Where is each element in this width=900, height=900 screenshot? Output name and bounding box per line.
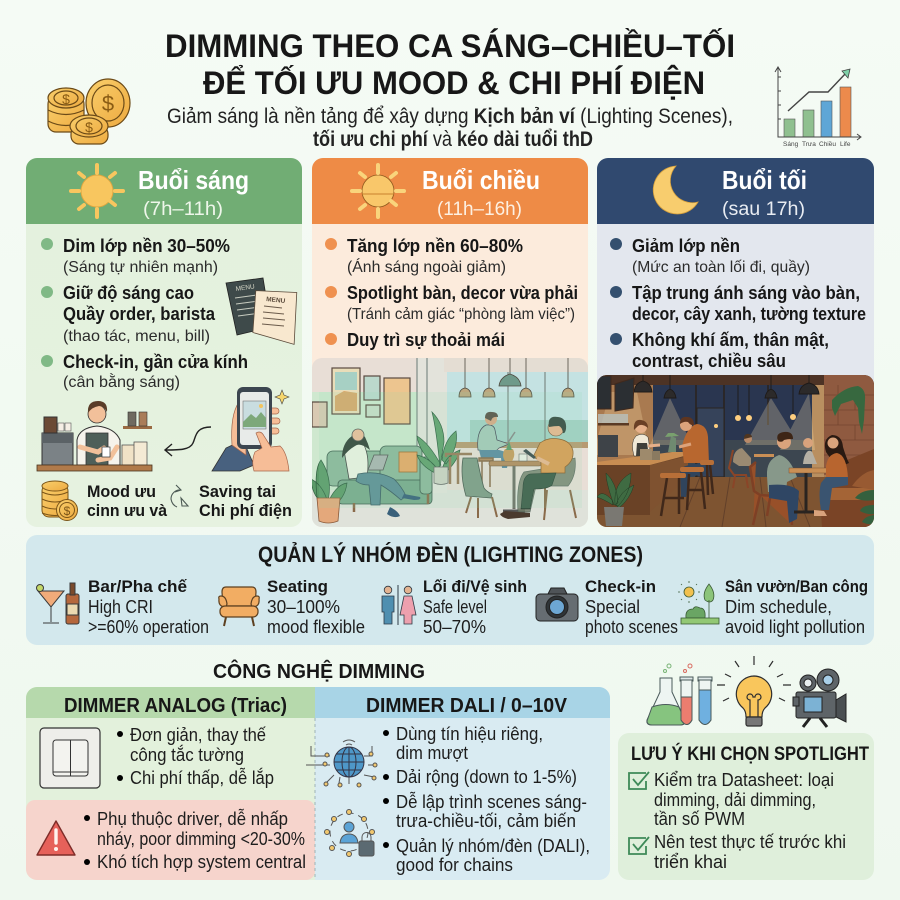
- icon: warning triangle: [37, 821, 75, 855]
- man with tablet: [500, 417, 576, 520]
- tint overlay: [319, 392, 582, 508]
- analog bullets: Chi phí thấp, dễ lắp: [130, 767, 274, 788]
- morning bullets: Quầy order, barista: [63, 304, 216, 324]
- afternoon heading: Buổi chiều: [422, 165, 540, 195]
- icon: cycle arrows: [171, 485, 188, 507]
- note two: triển khai: [654, 852, 727, 872]
- DALI bullets: Dải rộng (down to 1-5%): [396, 767, 577, 787]
- icon: coin stack: $: [64, 504, 71, 518]
- icon: gold coins: [48, 79, 130, 144]
- afternoon bullets: (Ánh sáng ngoài giảm): [347, 257, 506, 276]
- evening bullets: Không khí ấm, thân mật,: [632, 330, 829, 350]
- saving text: Chi phí điện: [199, 501, 292, 520]
- DALI bullets: [383, 724, 590, 875]
- counter and seated man: [597, 417, 709, 515]
- afternoon bullets: (Tránh cảm giác “phòng làm việc”): [347, 306, 575, 323]
- hanging lamps: [634, 375, 819, 415]
- mood text: cinn ưu và: [87, 501, 168, 520]
- morning bullets: (Sáng tự nhiên mạnh): [63, 259, 218, 276]
- light cones: [597, 392, 815, 455]
- icon: lab flask and tubes: [647, 664, 712, 725]
- evening bullets: decor, cây xanh, tường texture: [632, 304, 866, 324]
- zone: check-in: Special: [585, 597, 640, 617]
- zone: walkway: Safe level: [423, 597, 487, 617]
- chalkboards: [597, 376, 634, 411]
- panel: spotlight notes: [618, 733, 874, 880]
- zone: seating: Seating: [267, 577, 328, 596]
- analog bullets: [117, 725, 274, 788]
- analog bullets: Đơn giản, thay thế: [130, 725, 266, 745]
- evening bullets: Giảm lớp nền: [632, 236, 740, 256]
- panel: evening: [597, 158, 874, 527]
- zone: bar: High CRI: [88, 597, 153, 617]
- panel: lighting zones: [26, 535, 874, 645]
- DALI bullets: good for chains: [396, 855, 513, 875]
- DALI bullets: Quản lý nhóm/đèn (DALI),: [396, 836, 590, 856]
- morning bullets: [41, 236, 248, 391]
- technology heading: CÔNG NGHỆ DIMMING: [213, 659, 425, 683]
- icon: network globe: [306, 740, 377, 787]
- DALI bullets: Dùng tín hiệu riêng,: [396, 724, 543, 744]
- middle plant: [417, 412, 460, 484]
- mood text: Mood ưu: [87, 482, 156, 501]
- zone: walkway: Lối đi/Vệ sinh: [423, 577, 527, 596]
- subtitle: Giảm sáng là nền tảng để xây dựng Kịch bản ví (Lighting Scenes),: [167, 105, 733, 128]
- analog warnings: nháy, poor dimming <20-30%: [97, 829, 305, 849]
- morning bullets: Dim lớp nền 30–50%: [63, 236, 230, 256]
- pendant lamps: [459, 358, 574, 397]
- booth: [820, 449, 874, 527]
- note two: Nên test thực tế trước khi: [654, 832, 846, 852]
- panel: afternoon: [311, 158, 589, 527]
- evening cafe illustration: [597, 375, 874, 527]
- note one: [654, 770, 834, 829]
- icon: gold coins: $: [62, 91, 70, 107]
- afternoon hours: (11h–16h): [437, 199, 522, 220]
- phone in hand illustration: [212, 387, 289, 471]
- afternoon bullets: [325, 236, 578, 350]
- icon: cocktail and bottle: [36, 583, 79, 624]
- saving text: Saving tai: [199, 482, 276, 501]
- note two: [654, 832, 846, 872]
- wall frames: [312, 368, 410, 427]
- afternoon cafe illustration: [311, 358, 589, 527]
- icon: gold coins: $: [102, 91, 114, 116]
- zone: check-in: photo scenes: [585, 617, 678, 637]
- note one: Kiểm tra Datasheet: loại: [654, 770, 834, 790]
- front table: [489, 441, 541, 511]
- icon: film camera: [793, 669, 846, 727]
- stools: [661, 465, 713, 516]
- title: ĐỂ TỐI ƯU MOOD & CHI PHÍ ĐIỆN: [203, 65, 705, 101]
- icon: menus: [226, 278, 298, 344]
- zone: bar: [88, 577, 209, 637]
- icon: user control and lock: [324, 810, 374, 856]
- man at window: [446, 412, 515, 487]
- icon: growth bar chart: Chiều: [819, 139, 836, 148]
- evening hours: (sau 17h): [722, 199, 805, 220]
- zone: walkway: [423, 577, 527, 637]
- title: [165, 28, 735, 101]
- plant and pot: [597, 473, 634, 526]
- icon: camera: [536, 588, 578, 621]
- analog bullets: công tắc tường: [130, 744, 244, 765]
- DALI bullets: trưa-chiều-tối, cảm biến: [396, 811, 576, 831]
- spotlight heading: LƯU Ý KHI CHỌN SPOTLIGHT: [631, 743, 869, 765]
- icon: afternoon sun: [352, 165, 404, 217]
- zones heading: QUẢN LÝ NHÓM ĐÈN (LIGHTING ZONES): [258, 542, 643, 567]
- subtitle: tối ưu chi phí và kéo dài tuổi thD: [313, 128, 593, 151]
- front chair: [462, 458, 497, 518]
- left plant: [311, 460, 347, 523]
- sofa and woman: [327, 429, 432, 517]
- table front couple: [750, 432, 849, 525]
- zone: seating: 30–100%: [267, 597, 340, 617]
- analog warnings: Phụ thuộc driver, dễ nhấp: [97, 808, 288, 829]
- zone: seating: mood flexible: [267, 617, 365, 637]
- icon: menus: MENU: [235, 283, 256, 293]
- icon: gold coins: $: [85, 119, 93, 135]
- panel: morning: [26, 158, 302, 527]
- zone: check-in: [585, 577, 678, 637]
- window bar counter: [449, 442, 589, 448]
- note one: dimming, dải dimming,: [654, 790, 816, 810]
- morning bullets: (thao tác, menu, bill): [63, 328, 210, 345]
- saving text: [199, 482, 292, 520]
- subtitle: [167, 105, 733, 151]
- panel: dimmer technology: [26, 687, 610, 880]
- icon: growth bar chart: [775, 67, 861, 148]
- zone: garden: Sân vườn/Ban công: [725, 577, 868, 596]
- evening header: [597, 158, 874, 224]
- morning header: [26, 158, 302, 224]
- afternoon bullets: Spotlight bàn, decor vừa phải: [347, 283, 578, 303]
- note one: tần số PWM: [654, 809, 745, 829]
- morning bullets: Check-in, gần cửa kính: [63, 352, 248, 372]
- analog warnings: [84, 808, 306, 872]
- icon: sun: [71, 165, 123, 217]
- zone: seating: [267, 577, 365, 637]
- barista illustration: [37, 401, 152, 471]
- arrow: phone to barista: [165, 427, 211, 456]
- zone: garden: Dim schedule,: [725, 597, 832, 617]
- DALI bullets: dim mượt: [396, 743, 468, 763]
- icon: wall switch: [40, 728, 100, 788]
- afternoon header: [312, 158, 588, 224]
- icon: restroom people: [382, 585, 416, 625]
- analog heading: DIMMER ANALOG (Triac): [64, 695, 287, 717]
- zone: check-in: Check-in: [585, 577, 656, 596]
- barista: [598, 420, 660, 457]
- DALI heading: DIMMER DALI / 0–10V: [366, 695, 568, 717]
- afternoon bullets: Tăng lớp nền 60–80%: [347, 236, 523, 256]
- icon: moon: [653, 166, 698, 214]
- evening bullets: contrast, chiều sâu: [632, 351, 786, 371]
- icon: growth bar chart: Life: [840, 141, 851, 148]
- morning heading: Buổi sáng: [138, 165, 249, 195]
- evening bullets: (Mức an toàn lối đi, quầy): [632, 259, 810, 276]
- icon: garden: [678, 581, 719, 624]
- morning bullets: Giữ độ sáng cao: [63, 283, 194, 303]
- icon: coin stack: [42, 481, 78, 520]
- morning hours: (7h–11h): [143, 199, 223, 220]
- evening bullets: Tập trung ánh sáng vào bàn,: [632, 283, 860, 303]
- afternoon bullets: Duy trì sự thoải mái: [347, 330, 505, 350]
- checkbox two: [629, 837, 649, 854]
- shelf: [598, 414, 628, 423]
- zone: bar: >=60% operation: [88, 617, 209, 637]
- mood text: [87, 482, 168, 520]
- DALI bullets: Dễ lập trình scenes sáng-: [396, 791, 587, 812]
- evening heading: Buổi tối: [722, 165, 807, 195]
- zone: walkway: 50–70%: [423, 617, 486, 637]
- analog warnings: Khó tích hợp system central: [97, 852, 306, 872]
- right plants: [832, 386, 874, 524]
- back couple: [729, 434, 817, 488]
- title: DIMMING THEO CA SÁNG–CHIỀU–TỐI: [165, 28, 735, 64]
- morning bullets: (cân bằng sáng): [63, 372, 180, 391]
- zone: garden: [725, 577, 868, 637]
- icon: growth bar chart: Trưa: [802, 141, 816, 148]
- icon: menus: MENU: [266, 296, 286, 305]
- zone: bar: Bar/Pha chế: [88, 577, 188, 596]
- evening bullets: [610, 236, 866, 371]
- icon: armchair: [219, 587, 259, 626]
- zone: garden: avoid light pollution: [725, 617, 865, 637]
- checkbox one: [629, 772, 649, 789]
- icon: light bulb: [717, 656, 791, 726]
- icon: growth bar chart: Sáng: [783, 141, 799, 148]
